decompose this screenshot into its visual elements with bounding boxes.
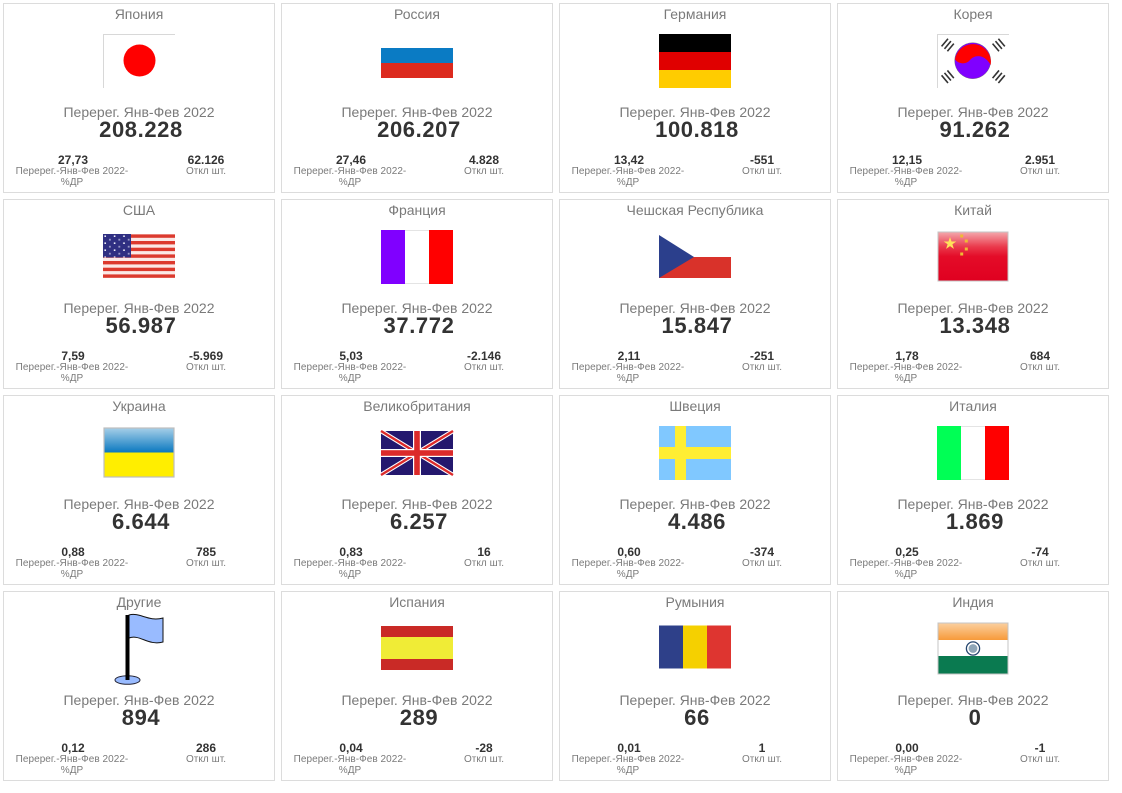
metric label: Перерег. Янв-Фев 2022 xyxy=(63,300,214,316)
share value: 2,11 xyxy=(618,349,640,363)
title: Корея xyxy=(953,6,993,22)
deviation value: 62.126 xyxy=(188,153,224,167)
title: Япония xyxy=(115,6,163,22)
share value: 5,03 xyxy=(339,349,363,363)
deviation label: Откл шт. xyxy=(1020,362,1060,373)
share label: %ДР xyxy=(339,569,361,580)
share label xyxy=(294,362,406,384)
title: Швеция xyxy=(669,398,721,414)
main value: 4.486 xyxy=(668,509,726,534)
deviation label: Откл шт. xyxy=(1020,558,1060,569)
card: США xyxy=(3,199,275,389)
icon: flag of Italy xyxy=(937,426,1009,480)
card: Чешская Республика xyxy=(559,199,831,389)
main value: 206.207 xyxy=(377,117,461,142)
icon: flag of Spain xyxy=(381,626,453,670)
deviation label: Откл шт. xyxy=(742,754,782,765)
deviation value: 785 xyxy=(196,545,216,559)
metric label: Перерег. Янв-Фев 2022 xyxy=(897,300,1048,316)
main value: 1.869 xyxy=(946,509,1004,534)
share label: %ДР xyxy=(895,373,917,384)
card: Россия xyxy=(281,3,553,193)
main value: 894 xyxy=(122,705,160,730)
icon: flag of India xyxy=(938,622,1008,674)
share label xyxy=(850,754,962,776)
card: Другие xyxy=(3,591,275,781)
deviation label: Откл шт. xyxy=(464,362,504,373)
share label: Перерег.-Янв-Фев 2022- xyxy=(294,754,406,765)
deviation label: Откл шт. xyxy=(186,754,226,765)
card: Швеция xyxy=(559,395,831,585)
share label: Перерег.-Янв-Фев 2022- xyxy=(572,754,684,765)
share label: %ДР xyxy=(61,177,83,188)
share value: 0,83 xyxy=(339,545,363,559)
share label xyxy=(294,754,406,776)
deviation label: Откл шт. xyxy=(186,166,226,177)
title: Испания xyxy=(389,594,445,610)
share value: 0,00 xyxy=(895,741,919,755)
share label: %ДР xyxy=(61,569,83,580)
deviation value: -2.146 xyxy=(467,349,501,363)
title: Чешская Республика xyxy=(627,202,763,218)
share label: Перерег.-Янв-Фев 2022- xyxy=(572,362,684,373)
metric label: Перерег. Янв-Фев 2022 xyxy=(897,692,1048,708)
deviation label: Откл шт. xyxy=(1020,754,1060,765)
deviation label: Откл шт. xyxy=(464,754,504,765)
card: Китай xyxy=(837,199,1109,389)
icon: flag of Ukraine xyxy=(103,427,175,478)
deviation value: -374 xyxy=(750,545,774,559)
deviation value: 2.951 xyxy=(1025,153,1055,167)
title: Франция xyxy=(388,202,446,218)
share label xyxy=(16,362,128,384)
metric label: Перерег. Янв-Фев 2022 xyxy=(897,104,1048,120)
share value: 27,46 xyxy=(336,153,366,167)
share label: %ДР xyxy=(339,177,361,188)
main value: 6.257 xyxy=(390,509,448,534)
share label xyxy=(572,166,684,188)
main value: 66 xyxy=(684,705,710,730)
title: Украина xyxy=(112,398,166,414)
share label xyxy=(294,166,406,188)
share value: 1,78 xyxy=(895,349,919,363)
metric label: Перерег. Янв-Фев 2022 xyxy=(341,692,492,708)
title: Россия xyxy=(394,6,440,22)
main value: 13.348 xyxy=(940,313,1010,338)
share value: 27,73 xyxy=(58,153,88,167)
deviation label: Откл шт. xyxy=(742,558,782,569)
metric label: Перерег. Янв-Фев 2022 xyxy=(619,300,770,316)
share label: Перерег.-Янв-Фев 2022- xyxy=(850,754,962,765)
share label: Перерег.-Янв-Фев 2022- xyxy=(294,166,406,177)
deviation label: Откл шт. xyxy=(742,166,782,177)
icon: flag of Russia xyxy=(381,48,453,78)
share value: 7,59 xyxy=(61,349,85,363)
main value: 0 xyxy=(969,705,981,730)
share label: Перерег.-Янв-Фев 2022- xyxy=(294,362,406,373)
card: Италия xyxy=(837,395,1109,585)
share label xyxy=(850,558,962,580)
share label: %ДР xyxy=(617,373,639,384)
share label: Перерег.-Янв-Фев 2022- xyxy=(16,558,128,569)
icon: generic blue flag on pole xyxy=(114,614,164,685)
icon: flag of Sweden xyxy=(659,426,731,480)
icon: flag of Korea xyxy=(937,34,1009,88)
share label: Перерег.-Янв-Фев 2022- xyxy=(16,754,128,765)
share label: %ДР xyxy=(617,569,639,580)
deviation value: 1 xyxy=(759,741,765,755)
share label: %ДР xyxy=(339,373,361,384)
title: Китай xyxy=(954,202,992,218)
icon: flag of United Kingdom xyxy=(380,430,454,476)
share label: %ДР xyxy=(895,569,917,580)
main value: 37.772 xyxy=(384,313,454,338)
share label: %ДР xyxy=(617,765,639,776)
icon: flag of Japan xyxy=(103,34,175,88)
share value: 0,25 xyxy=(895,545,919,559)
share label: %ДР xyxy=(61,373,83,384)
title: Германия xyxy=(664,6,726,22)
share label: Перерег.-Янв-Фев 2022- xyxy=(572,166,684,177)
metric label: Перерег. Янв-Фев 2022 xyxy=(63,692,214,708)
share label: Перерег.-Янв-Фев 2022- xyxy=(294,558,406,569)
main value: 289 xyxy=(400,705,438,730)
card: Япония xyxy=(3,3,275,193)
share value: 0,01 xyxy=(617,741,641,755)
icon: flag of USA xyxy=(103,234,175,278)
metric label: Перерег. Янв-Фев 2022 xyxy=(341,300,492,316)
share label: Перерег.-Янв-Фев 2022- xyxy=(850,558,962,569)
metric label: Перерег. Янв-Фев 2022 xyxy=(341,496,492,512)
title: Индия xyxy=(952,594,994,610)
metric label: Перерег. Янв-Фев 2022 xyxy=(619,496,770,512)
share label xyxy=(572,362,684,384)
icon: flag of France xyxy=(381,230,453,284)
deviation value: -5.969 xyxy=(189,349,223,363)
metric label: Перерег. Янв-Фев 2022 xyxy=(619,692,770,708)
deviation value: -1 xyxy=(1035,741,1045,755)
metric label: Перерег. Янв-Фев 2022 xyxy=(63,104,214,120)
metric label: Перерег. Янв-Фев 2022 xyxy=(341,104,492,120)
deviation label: Откл шт. xyxy=(464,558,504,569)
share value: 0,04 xyxy=(339,741,363,755)
share label: Перерег.-Янв-Фев 2022- xyxy=(850,166,962,177)
metric label: Перерег. Янв-Фев 2022 xyxy=(63,496,214,512)
card: Франция xyxy=(281,199,553,389)
main value: 56.987 xyxy=(106,313,176,338)
share label xyxy=(16,754,128,776)
share label xyxy=(850,362,962,384)
icon: flag of Romania xyxy=(659,626,731,668)
share label: Перерег.-Янв-Фев 2022- xyxy=(850,362,962,373)
main value: 208.228 xyxy=(99,117,183,142)
share label: %ДР xyxy=(339,765,361,776)
card: Украина xyxy=(3,395,275,585)
card: Корея xyxy=(837,3,1109,193)
share label: %ДР xyxy=(895,765,917,776)
title: Великобритания xyxy=(363,398,471,414)
card: Испания xyxy=(281,591,553,781)
icon: flag of Czech Republic xyxy=(659,235,731,278)
deviation value: 684 xyxy=(1030,349,1050,363)
deviation value: -551 xyxy=(750,153,774,167)
deviation value: 4.828 xyxy=(469,153,499,167)
deviation value: 286 xyxy=(196,741,216,755)
share value: 12,15 xyxy=(892,153,922,167)
title: Италия xyxy=(949,398,997,414)
share label: %ДР xyxy=(61,765,83,776)
metric label: Перерег. Янв-Фев 2022 xyxy=(897,496,1048,512)
deviation label: Откл шт. xyxy=(186,362,226,373)
share value: 0,12 xyxy=(61,741,85,755)
share label xyxy=(294,558,406,580)
main value: 6.644 xyxy=(112,509,170,534)
share label: Перерег.-Янв-Фев 2022- xyxy=(16,362,128,373)
deviation label: Откл шт. xyxy=(742,362,782,373)
share value: 0,60 xyxy=(617,545,641,559)
deviation value: -251 xyxy=(750,349,774,363)
share label xyxy=(572,558,684,580)
share label: Перерег.-Янв-Фев 2022- xyxy=(16,166,128,177)
share label: %ДР xyxy=(617,177,639,188)
share label: %ДР xyxy=(895,177,917,188)
deviation value: 16 xyxy=(477,545,491,559)
title: Румыния xyxy=(665,594,724,610)
card: Румыния xyxy=(559,591,831,781)
icon: flag of China xyxy=(938,232,1008,282)
deviation value: -74 xyxy=(1031,545,1049,559)
deviation value: -28 xyxy=(475,741,493,755)
share label xyxy=(16,166,128,188)
share label xyxy=(16,558,128,580)
card: Великобритания xyxy=(281,395,553,585)
card: Индия xyxy=(837,591,1109,781)
share label xyxy=(850,166,962,188)
deviation label: Откл шт. xyxy=(186,558,226,569)
deviation label: Откл шт. xyxy=(464,166,504,177)
share label xyxy=(572,754,684,776)
main value: 100.818 xyxy=(655,117,739,142)
title: США xyxy=(123,202,155,218)
metric label: Перерег. Янв-Фев 2022 xyxy=(619,104,770,120)
main value: 15.847 xyxy=(662,313,732,338)
icon: flag of Germany xyxy=(659,34,731,88)
share value: 13,42 xyxy=(614,153,644,167)
title: Другие xyxy=(117,594,161,610)
main value: 91.262 xyxy=(940,117,1010,142)
share label: Перерег.-Янв-Фев 2022- xyxy=(572,558,684,569)
share value: 0,88 xyxy=(61,545,85,559)
deviation label: Откл шт. xyxy=(1020,166,1060,177)
card: Германия xyxy=(559,3,831,193)
